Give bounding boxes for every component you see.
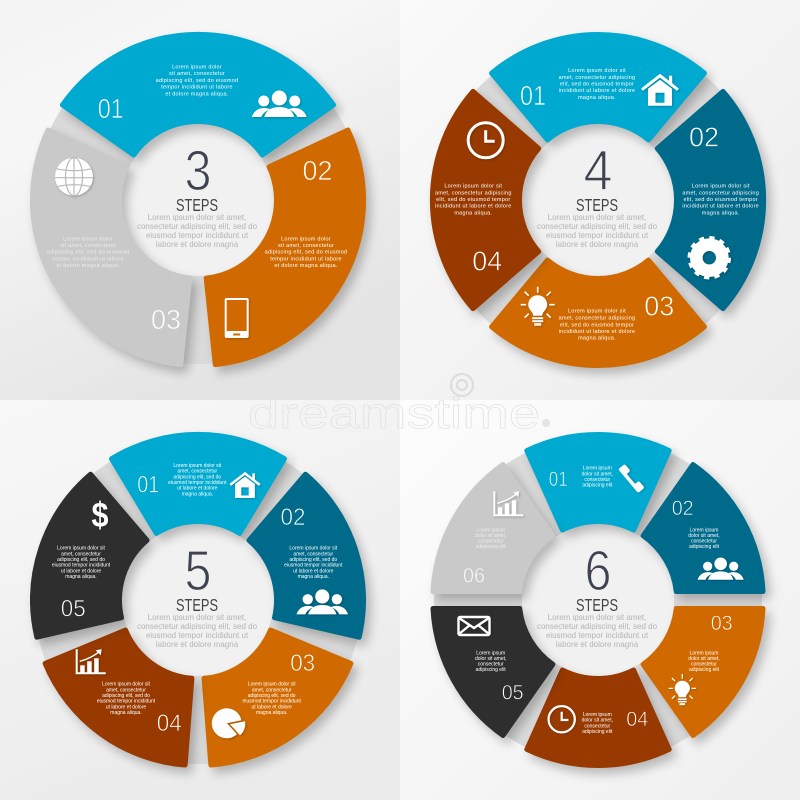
text: step 02: magna aliqua. [702, 210, 740, 216]
text: step 06: dolor sit amet, [475, 533, 506, 539]
heading: 4 steps: STEPS [576, 195, 618, 215]
text: step 02: tempor incididunt ut labore [270, 256, 342, 262]
text: step 03: Lorem ipsum dolor [63, 236, 113, 242]
heading: 5 steps: consectetur adipiscing elit, sed do [137, 622, 258, 631]
text: step 04: Lorem ipsum [583, 712, 612, 718]
text: step 01: Lorem ipsum dolor sit [173, 463, 222, 469]
text: step 01: amet, consectetur adipiscing [559, 75, 635, 81]
watermark [248, 374, 550, 438]
icon: globe [55, 158, 93, 196]
icon: clock [468, 123, 503, 158]
number 03: 03 [151, 304, 181, 335]
heading: 4 steps: 4 [584, 139, 612, 203]
number 05: 05 [61, 596, 86, 623]
icon: house [642, 76, 678, 106]
number 01: 01 [520, 80, 546, 111]
text: step 01: adipiscing elit, sed do eiusmod [156, 78, 238, 84]
heading: 3 steps: consectetur adipiscing elit, sed do [137, 222, 258, 231]
icon: envelope [458, 617, 490, 635]
heading: 5 steps [137, 539, 258, 649]
icon: light bulb [669, 674, 696, 705]
heading: 5 steps: eiusmod tempor incididunt ut [146, 631, 249, 640]
heading: 4 steps [537, 139, 658, 249]
text: step 02: adipiscing elit, sed do [289, 557, 337, 563]
text: step 05: consectetur [478, 662, 504, 668]
heading: 5 steps: 5 [184, 539, 212, 603]
panel: background of 6 steps [400, 400, 800, 800]
text: step 04: consectetur [584, 723, 611, 729]
segment 02 [206, 130, 364, 365]
text: step 04: amet, consectetur [106, 687, 146, 693]
heading: 5 steps: Lorem ipsum dolor sit amet, [148, 613, 246, 622]
text: step 04: ut labore et dolore [106, 704, 146, 710]
icon: house [230, 473, 260, 498]
heading: 4 steps: consectetur adipiscing elit, sed do [537, 222, 658, 231]
text: step 03: magna aliqua. [578, 336, 616, 342]
text: step 01: Lorem ipsum [583, 466, 612, 472]
text: step 01: amet, consectetur [177, 469, 218, 475]
text: step 02: Lorem ipsum [690, 527, 718, 533]
text: step 02: ut labore et dolore [293, 568, 334, 574]
text: step 03: tempor incididunt ut labore [52, 256, 124, 262]
segment 02 [249, 474, 363, 637]
number 04: 04 [157, 710, 182, 737]
text: step 02: sit amet, consectetur [278, 243, 334, 249]
heading: 3 steps: eiusmod tempor incididunt ut [146, 231, 249, 240]
text: step 02: adipiscing elit, sed do eiusmod [265, 250, 347, 256]
text: step 01: consectetur [584, 477, 611, 483]
heading: 4 steps: Lorem ipsum dolor sit amet, [548, 213, 646, 222]
number 02: 02 [302, 155, 332, 186]
heading: 5 steps: STEPS [176, 595, 218, 615]
text: step 03: adipiscing elit [689, 667, 720, 673]
number 04: 04 [626, 707, 648, 731]
text: step 01: sit amet, consectetur [169, 71, 225, 77]
text: step 01: eiusmod tempor incididunt [168, 480, 227, 486]
text: step 04: Lorem ipsum dolor sit [444, 184, 502, 190]
icon: light bulb [521, 287, 555, 326]
text: step 05: magna aliqua. [65, 574, 97, 580]
text: step 01: Lorem ipsum dolor sit [568, 68, 626, 74]
text: step 02: et dolore magna aliqua. [274, 263, 338, 269]
text: step 03: sit amet, consectetur [60, 243, 116, 249]
text: step 05: adipiscing elit [476, 667, 506, 673]
text: step 06: adipiscing elit [476, 544, 506, 550]
chart: 6 steps circle [433, 435, 763, 765]
text: step 01: adipiscing elit, sed do [173, 474, 221, 480]
text: step 02: Lorem ipsum dolor sit [692, 184, 750, 190]
watermark: dreamstime [248, 389, 540, 438]
segment 04 [45, 630, 192, 765]
number 01: 01 [549, 467, 568, 491]
text: step 01: incididunt ut labore et dolore [559, 88, 635, 94]
segment 03 [204, 630, 351, 765]
text: step 01: Lorem ipsum dolor [172, 64, 222, 70]
segment 02 [643, 464, 763, 592]
text: step 02: Lorem ipsum dolor [281, 236, 331, 242]
text: step 05: Lorem ipsum dolor sit [57, 546, 106, 552]
segment 01 [62, 34, 334, 155]
heading: 5 steps: labore et dolore magna [156, 640, 239, 649]
icon: growth chart [494, 491, 523, 515]
segment 03 [643, 608, 763, 736]
icon: clock [549, 706, 575, 732]
text: step 03: et dolore magna aliqua. [56, 263, 120, 269]
chart: 4 steps circle [432, 34, 764, 366]
number 01: 01 [98, 93, 124, 124]
text: step 05: dolor sit amet, [475, 656, 506, 662]
number 03: 03 [711, 611, 733, 635]
text: step 02: Lorem ipsum dolor sit [289, 546, 338, 552]
text: step 03: adipiscing elit, sed do [248, 693, 296, 699]
segment 03 [32, 130, 190, 365]
heading: 6 steps: consectetur adipiscing elit, sed do [537, 622, 658, 631]
text: step 02: consectetur [691, 539, 717, 545]
icon: pie chart [212, 708, 245, 738]
text: step 06: Lorem ipsum [476, 527, 505, 533]
text: step 04: dolor sit amet, [582, 718, 613, 724]
text: step 02: incididunt ut labore et dolore [682, 204, 759, 210]
icon: telephone handset [618, 464, 645, 493]
text: step 01: elit, sed do eiusmod tempor [560, 82, 634, 88]
icon: smartphone [225, 298, 249, 338]
text: step 02: amet, consectetur [293, 551, 334, 557]
heading: 3 steps: 3 [184, 139, 212, 203]
text: step 03: Lorem ipsum dolor sit [248, 682, 296, 688]
text: step 03: elit, sed do eiusmod tempor [560, 322, 634, 328]
text: step 04: adipiscing elit, sed do [102, 693, 150, 699]
heading: 6 steps: 6 [584, 539, 612, 603]
icon: people [252, 90, 307, 117]
segment 05 [433, 608, 553, 736]
text: step 03: magna aliqua. [256, 710, 287, 716]
text: step 04: magna aliqua. [110, 710, 142, 716]
segment 04 [527, 670, 669, 765]
segment 04 [432, 91, 539, 309]
icon: people [296, 589, 348, 614]
text: step 03: Lorem ipsum dolor sit [568, 309, 626, 315]
text: step 02: amet, consectetur adipiscing [682, 190, 759, 196]
text: step 03: consectetur [691, 662, 717, 668]
text: step 05: adipiscing elit, sed do [57, 557, 105, 563]
heading: 3 steps: Lorem ipsum dolor sit amet, [148, 213, 246, 222]
heading: 4 steps: labore et dolore magna [556, 240, 639, 249]
text: step 05: eiusmod tempor incididunt [52, 563, 111, 569]
number 06: 06 [463, 563, 485, 587]
icon: people [698, 557, 744, 580]
text: step 02: elit, sed do eiusmod tempor [684, 197, 758, 203]
text: step 04: elit, sed do eiusmod tempor [436, 197, 510, 203]
heading: 3 steps [137, 139, 258, 249]
text: step 03: incididunt ut labore et dolore [559, 329, 635, 335]
text: step 02: adipiscing elit [689, 544, 720, 550]
number 02: 02 [280, 504, 306, 531]
heading: 6 steps: eiusmod tempor incididunt ut [546, 631, 649, 640]
heading: 6 steps: STEPS [576, 595, 618, 615]
number 02: 02 [689, 122, 719, 153]
text: step 02: eiusmod tempor incididunt [284, 563, 343, 569]
text: step 03: eiusmod tempor incididunt [243, 699, 301, 705]
text: step 05: ut labore et dolore [61, 568, 101, 574]
chart: 5 steps circle [33, 434, 363, 765]
number 03: 03 [290, 650, 315, 677]
number 03: 03 [644, 291, 674, 322]
panel: background of 4 steps [400, 0, 800, 400]
text: step 03: amet, consectetur adipiscing [559, 316, 635, 322]
text: step 01: adipiscing elit [582, 483, 613, 489]
number 01: 01 [137, 472, 159, 499]
heading: 3 steps: STEPS [176, 195, 218, 215]
segment 01 [112, 434, 284, 533]
text: step 04: eiusmod tempor incididunt [97, 699, 156, 705]
text: step 01: magna aliqua. [182, 491, 213, 497]
heading: 6 steps [537, 539, 658, 649]
text: step 02: dolor sit amet, [688, 533, 720, 539]
text: step 04: magna aliqua. [454, 210, 492, 216]
text: step 04: adipiscing elit [582, 729, 613, 735]
panel: background of 5 steps [0, 400, 400, 800]
segment 01 [527, 435, 669, 530]
text: step 04: Lorem ipsum dolor sit [102, 682, 151, 688]
text: step 03: amet, consectetur [252, 687, 292, 693]
heading: 4 steps: eiusmod tempor incididunt ut [546, 231, 649, 240]
text: step 02: magna aliqua. [298, 574, 329, 580]
text: step 01: tempor incididunt ut labore [161, 84, 233, 90]
text: step 05: Lorem ipsum [476, 650, 505, 656]
text: step 01: ut labore et dolore [177, 486, 218, 492]
segment 01 [492, 34, 704, 140]
number 02: 02 [672, 496, 694, 520]
text: step 04: amet, consectetur adipiscing [435, 190, 512, 196]
segment 02 [657, 91, 764, 309]
text: step 04: incididunt ut labore et dolore [435, 204, 512, 210]
icon: dollar: $ [92, 496, 108, 535]
text: step 05: amet, consectetur [61, 551, 101, 557]
number 05: 05 [502, 680, 524, 704]
segment 03 [492, 260, 704, 366]
heading: 3 steps: labore et dolore magna [156, 240, 239, 249]
text: step 03: ut labore et dolore [252, 704, 292, 710]
text: step 01: magna aliqua. [578, 95, 616, 101]
icon: gear [690, 238, 729, 277]
heading: 6 steps: labore et dolore magna [556, 640, 639, 649]
text: step 03: adipiscing elit, sed do eiusmod [47, 250, 129, 256]
text: step 03: Lorem ipsum [690, 650, 718, 656]
icon: growth chart [77, 649, 106, 673]
segment 06 [433, 464, 553, 592]
segment 05 [33, 474, 147, 637]
number 04: 04 [472, 246, 502, 277]
panel: background of 3 steps [0, 0, 400, 400]
text: step 01: dolor sit amet, [582, 471, 613, 477]
text: step 01: et dolore magna aliqua. [165, 92, 229, 98]
heading: 6 steps: Lorem ipsum dolor sit amet, [548, 613, 646, 622]
text: step 06: consectetur [478, 539, 504, 545]
text: step 03: dolor sit amet, [688, 656, 720, 662]
